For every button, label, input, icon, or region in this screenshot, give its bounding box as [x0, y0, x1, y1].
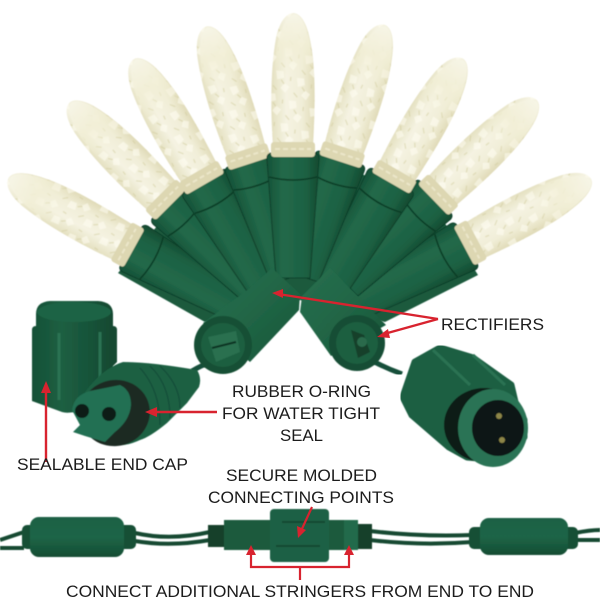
panel: connected strand photo — [0, 509, 600, 562]
arrows: connect bracket — [246, 545, 354, 580]
lamp 6 — [278, 17, 409, 285]
label: rubber O-ring: SEAL — [280, 427, 323, 445]
wires between rectifiers and plugs — [192, 355, 402, 374]
label: secure molded connecting points: CONNECTING POINTS — [208, 489, 394, 507]
arrow: molded connecting points — [297, 507, 312, 538]
right inline rectifier — [469, 518, 578, 555]
lamp 8 — [328, 81, 555, 303]
panel: fan of LED lamps — [0, 13, 600, 330]
wires — [0, 530, 600, 548]
left inline rectifier — [22, 517, 136, 557]
label: sealable end cap: SEALABLE END CAP — [17, 456, 188, 474]
label: rubber O-ring: FOR WATER TIGHT — [222, 405, 380, 423]
lamp 7 — [307, 45, 485, 301]
label: rubber O-ring: RUBBER O-RING — [232, 383, 371, 401]
label: rectifiers: RECTIFIERS — [441, 316, 544, 334]
icon: male plug — [403, 348, 528, 467]
arrow: O-ring — [145, 407, 217, 417]
lamp 3 — [111, 46, 289, 302]
lamp 1: far left — [0, 156, 253, 330]
label: secure molded connecting points: SECURE MOLDED — [226, 467, 377, 485]
lamp 5: centre — [267, 13, 319, 278]
lamp 2 — [51, 85, 275, 309]
arrow: end cap — [41, 381, 51, 462]
label: secure molded connecting points — [208, 467, 394, 507]
left rectifier — [194, 268, 300, 374]
label: rubber O-ring — [222, 383, 380, 445]
label: connect additional stringers: CONNECT ADDITIONAL STRINGERS FROM END TO END — [66, 583, 534, 601]
arrows: rectifiers — [272, 289, 438, 338]
icon: female plug with O-ring — [72, 362, 200, 454]
inline connector — [208, 509, 372, 562]
right rectifier — [300, 268, 386, 371]
fan backing — [118, 160, 478, 322]
lamp 4 — [181, 19, 312, 287]
lamp 9: far right — [345, 156, 600, 326]
icon: sealable end cap — [32, 301, 117, 413]
